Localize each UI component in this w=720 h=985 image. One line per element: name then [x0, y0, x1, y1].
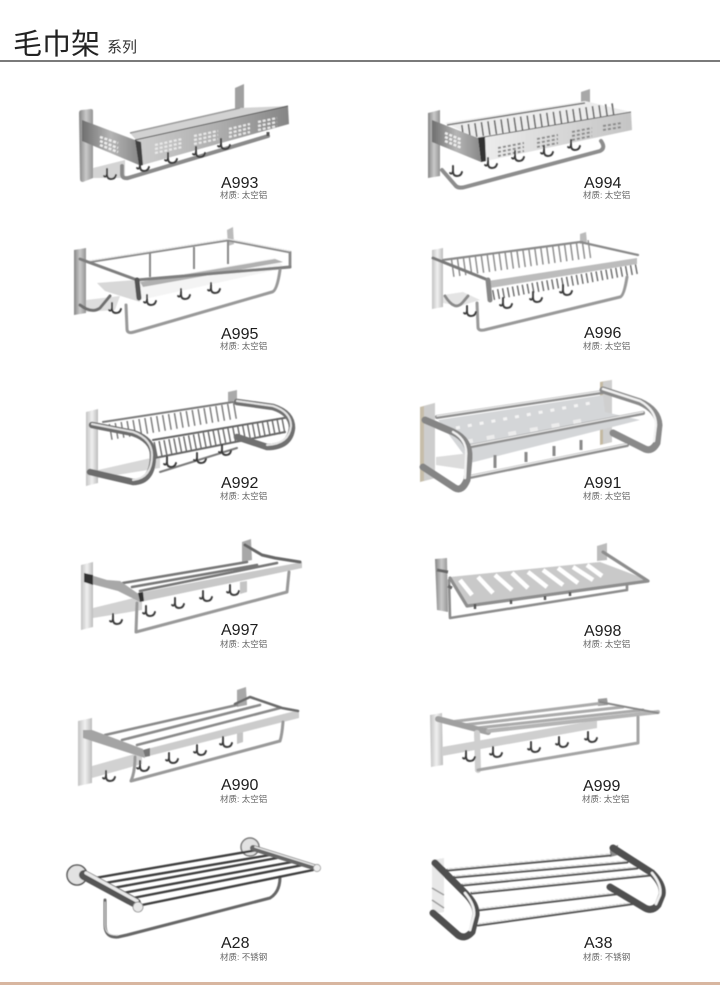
label A991: A991	[584, 475, 621, 492]
label A999: A999	[583, 778, 620, 795]
label A992: A992	[221, 475, 258, 492]
label A992: 材质: 太空铝	[220, 491, 267, 501]
product: A990	[78, 687, 299, 804]
label A998	[583, 623, 630, 649]
label A994: A994	[584, 175, 621, 192]
label A38	[583, 935, 630, 962]
title: 系列	[107, 39, 137, 56]
label A996	[583, 325, 630, 351]
label A999	[582, 778, 629, 804]
label A995: A995	[221, 326, 258, 343]
label A999: 材质: 太空铝	[582, 794, 629, 804]
rack A999	[430, 698, 658, 770]
rack A992	[86, 390, 292, 486]
label A28: 材质: 不锈钢	[220, 952, 267, 962]
rack A996	[432, 232, 638, 330]
label A28: A28	[221, 935, 250, 952]
bottom band	[0, 982, 720, 985]
label A991	[583, 475, 630, 501]
label A990	[220, 777, 267, 804]
label A990: 材质: 太空铝	[220, 794, 267, 804]
label A991: 材质: 太空铝	[583, 491, 630, 501]
product: A997	[81, 539, 302, 649]
rack A990	[78, 687, 299, 786]
label A996: 材质: 太空铝	[583, 341, 630, 351]
label A993	[220, 175, 267, 200]
label A993: 材质: 太空铝	[220, 190, 267, 200]
product: A996	[432, 232, 638, 351]
product: A998	[435, 543, 648, 649]
product: A995	[74, 227, 290, 351]
product: A991	[420, 380, 659, 501]
label A995	[220, 326, 267, 351]
product: A28	[67, 838, 321, 962]
label A38: A38	[584, 935, 613, 952]
product: A993	[79, 84, 289, 200]
label A28	[220, 935, 267, 962]
rack A998	[435, 543, 648, 618]
rack A38	[432, 845, 662, 937]
rack A994	[428, 89, 632, 188]
label A996: A996	[584, 325, 621, 342]
label A992	[220, 475, 267, 501]
product: A994	[428, 89, 632, 200]
product: A999	[430, 698, 658, 804]
product: A992	[86, 390, 292, 501]
rack A28	[67, 838, 321, 937]
label A998: 材质: 太空铝	[583, 639, 630, 649]
title: 毛巾架	[13, 28, 100, 61]
label A995: 材质: 太空铝	[220, 341, 267, 351]
label A998: A998	[584, 623, 621, 640]
title	[13, 28, 137, 61]
label A994: 材质: 太空铝	[583, 190, 630, 200]
rack A993	[79, 84, 289, 182]
label A997	[220, 622, 267, 649]
label A997: 材质: 太空铝	[220, 639, 267, 649]
label A38: 材质: 不锈钢	[583, 952, 630, 962]
product: A38	[432, 845, 662, 962]
label A990: A990	[221, 777, 258, 794]
rack A995	[74, 227, 290, 333]
label A997: A997	[221, 622, 258, 639]
label A994	[583, 175, 630, 200]
label A993: A993	[221, 175, 258, 192]
rack A997	[81, 539, 302, 632]
rack A991	[420, 380, 659, 489]
